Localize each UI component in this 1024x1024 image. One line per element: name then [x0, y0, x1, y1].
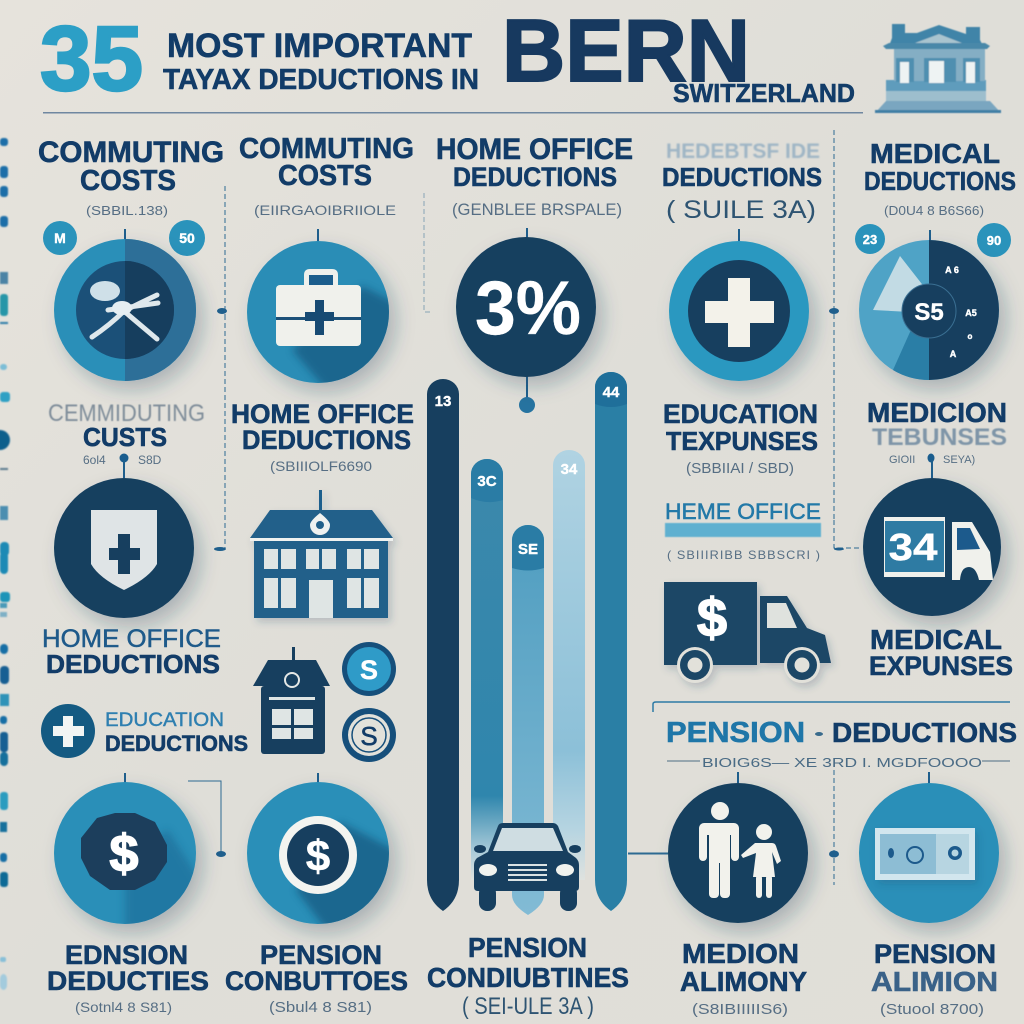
- heading: [864, 138, 1016, 196]
- icon: dollar coin blue: [342, 642, 396, 696]
- bar 3: [512, 525, 544, 915]
- heading: CONBUTTOES: [225, 966, 408, 996]
- icon: delivery truck with dollar: [664, 582, 831, 683]
- panel: medical deductions: [855, 138, 1016, 380]
- heading: DEDUCTIONS: [46, 649, 220, 679]
- heading: [225, 940, 408, 996]
- subtext: (EIIRGAOIBRIIOLE: [254, 202, 396, 218]
- heading: MEDION: [682, 938, 799, 969]
- subtext: BIOIG6S— XE 3RD I. MGDFOOOO: [702, 755, 982, 770]
- icon: dollar coin outline: S: [360, 721, 378, 751]
- badge left: [43, 221, 77, 255]
- heading: HOME OFFICE: [42, 625, 221, 653]
- heading: [867, 397, 1007, 451]
- icon: dollar circle: $: [110, 825, 139, 883]
- heading: MEDICAL: [870, 138, 1000, 169]
- icon: delivery truck with dollar: $: [697, 588, 727, 648]
- heading: PENSION: [874, 939, 996, 969]
- title: Switzerland: SWITZERLAND: [673, 78, 855, 108]
- subtext: S8D: [138, 453, 162, 467]
- heading: [663, 399, 818, 456]
- heading: COSTS: [80, 165, 176, 197]
- panel: pension contributions centre: [427, 932, 629, 1020]
- icon: office building: [250, 490, 393, 618]
- heading: COMMUTING: [239, 133, 414, 165]
- subtext: ( SUILE 3A): [666, 196, 816, 224]
- heading: ALIMONY: [680, 966, 807, 997]
- header rule: [43, 112, 863, 114]
- icon: 3 percent circle: [456, 228, 596, 413]
- heading: COMMUTING: [38, 136, 224, 169]
- icon: Bern government building: [875, 24, 1001, 113]
- subtext: ( SEI-ULE 3A ): [462, 993, 594, 1020]
- panel: pension deductions bottom left: [47, 773, 209, 1015]
- badge left: [855, 224, 885, 254]
- heading: COSTS: [278, 160, 372, 192]
- heading: DEDUCTIES: [47, 966, 209, 996]
- medical expenses heading: [869, 624, 1013, 681]
- icon: car: [474, 823, 581, 911]
- subtext: (D0U4 8 B6S66): [884, 203, 984, 218]
- panel: home office row 2: [231, 399, 414, 618]
- icon: dollar circle: [54, 773, 200, 930]
- subtext: (S8IBIIIIIS6): [692, 1001, 788, 1018]
- heading: EDNSION: [65, 940, 188, 970]
- badge right: [977, 223, 1011, 257]
- panel: pension alimony: [871, 939, 998, 1018]
- heading: PENSION: [468, 932, 587, 963]
- icon: pie chart: A: [950, 349, 957, 359]
- icon: parent and child circle: [668, 772, 808, 923]
- icon: 3 percent circle: 3%: [475, 266, 581, 351]
- icon: pie chart: A5: [965, 308, 977, 318]
- badge left: 23: [863, 232, 877, 247]
- connector lines: [188, 130, 1010, 885]
- blurred heading: CEMMIDUTING: [48, 400, 205, 427]
- badge right: [169, 220, 205, 256]
- education heading: DEDUCTIONS: [105, 731, 248, 756]
- icon: truck 34 circle: 34: [888, 527, 938, 569]
- title: number 35: 35: [40, 8, 143, 110]
- panel: education expenses: [663, 399, 818, 477]
- icon: plus badge: [41, 704, 95, 758]
- subtext: (SBBIIAI / SBD): [686, 460, 794, 477]
- bar 4: 34: [561, 461, 578, 478]
- heading: MEDICION: [867, 397, 1007, 428]
- heading: HEME OFFICE: [665, 499, 821, 524]
- heading: TEXPUNSES: [666, 426, 818, 456]
- bar 4: [553, 450, 585, 880]
- bar 2: [471, 459, 503, 880]
- connector dots: [214, 308, 844, 858]
- subtext: (SBIIIOLF6690: [270, 458, 372, 474]
- icon: pie chart: A 6: [945, 265, 959, 275]
- title block: [40, 1, 855, 110]
- badge right: 90: [987, 233, 1001, 248]
- icon: small house: [253, 647, 330, 754]
- subtext: (GENBLEE BRSPALE): [452, 200, 622, 219]
- heading: [871, 939, 998, 997]
- subtext: (Sotnl4 8 S81): [75, 999, 172, 1015]
- icon: plus circle: [669, 229, 809, 381]
- heading: [680, 938, 807, 997]
- panel: commuting costs 1: [38, 136, 224, 381]
- icon: dollar coin circle: $: [306, 832, 330, 881]
- panel: home office row 3: [41, 625, 396, 762]
- bar 5: 44: [603, 384, 620, 401]
- heading: DEDUCTIONS: [242, 425, 411, 455]
- title: BERN: BERN: [502, 1, 750, 100]
- panel: pension contributions left: [225, 773, 408, 1016]
- heading: ALIMION: [871, 966, 998, 997]
- panel: medicion expenses: [863, 397, 1007, 616]
- bar 1: [427, 379, 459, 911]
- heading: [239, 133, 414, 192]
- badge left: M: [54, 230, 66, 246]
- icon: pie chart: [859, 230, 999, 380]
- panel: home office with truck: [664, 499, 831, 683]
- icon: dollar coin circle: [247, 773, 395, 935]
- heading: PENSION: [260, 940, 382, 970]
- title: most important: MOST IMPORTANT: [167, 27, 472, 65]
- bar 5: [595, 372, 627, 911]
- heading: DEDUCTIONS: [662, 162, 822, 192]
- subtext: [889, 454, 975, 466]
- heading: PENSION: [666, 717, 805, 749]
- heading: [47, 940, 209, 996]
- icon: dollar coin blue: S: [360, 655, 378, 685]
- icon: shield circle: [54, 454, 194, 618]
- icon: medical briefcase: [247, 229, 400, 400]
- medical expenses heading: MEDICAL: [870, 624, 1002, 655]
- title: tax deductions in: TAYAX DEDUCTIONS IN: [163, 64, 479, 96]
- panel: medion alimony: [680, 938, 807, 1018]
- panel: deductions schedule 3a: [662, 140, 822, 381]
- bar 2: 3C: [477, 473, 497, 490]
- subtext: (SBBIL.138): [86, 203, 168, 218]
- panel: money circle: [859, 772, 999, 923]
- education heading: EDUCATION: [105, 710, 224, 731]
- subtext: (Sbul4 8 S81): [269, 999, 372, 1016]
- heading: CUSTS: [83, 422, 167, 452]
- bar 3: SE: [518, 541, 538, 558]
- heading: [666, 717, 1017, 749]
- panel: commuting costs row 2: [48, 400, 205, 618]
- icon: banknote: [875, 828, 975, 880]
- panel: pension deductions: [666, 717, 1017, 923]
- icon: dollar coin outline: [342, 708, 396, 762]
- icon: commuting circle: [54, 229, 196, 381]
- bar 1: 13: [435, 393, 451, 410]
- heading: [427, 932, 629, 993]
- icon: truck 34 circle: [863, 454, 1001, 616]
- medical expenses heading: EXPUNSES: [869, 651, 1013, 681]
- subtext: SEYA): [943, 454, 975, 466]
- subtext: ( SBIIIRIBB SBBSCRI ): [667, 548, 821, 562]
- heading: [231, 399, 414, 455]
- panel: commuting costs 2: [239, 133, 414, 400]
- icon: pie chart: S5: [914, 299, 944, 326]
- heading: CONDIUBTINES: [427, 962, 629, 993]
- heading: TEBUNSES: [872, 424, 1007, 451]
- bar chart: [427, 372, 627, 915]
- heading: DEDUCTIONS: [453, 162, 617, 192]
- education heading: [105, 710, 248, 756]
- subtext: (Stuool 8700): [880, 1001, 984, 1018]
- badge right: 50: [179, 230, 195, 246]
- highlight bar: [665, 523, 821, 537]
- heading: [38, 136, 224, 197]
- blurred heading line: HEDEBTSF IDE: [666, 140, 820, 163]
- heading: [436, 133, 633, 192]
- left edge strip of cropped marks: [0, 138, 10, 990]
- subtext: 6ol4: [83, 453, 106, 467]
- icon: pie chart: o: [968, 332, 973, 341]
- heading: DEDUCTIONS: [832, 717, 1017, 748]
- heading: [42, 625, 221, 679]
- subtext: [83, 453, 162, 467]
- panel: home office deductions top: [436, 133, 633, 413]
- heading: HOME OFFICE: [231, 399, 414, 429]
- subtext: GIOII: [889, 454, 915, 466]
- heading: EDUCATION: [663, 399, 818, 429]
- heading: HOME OFFICE: [436, 133, 633, 166]
